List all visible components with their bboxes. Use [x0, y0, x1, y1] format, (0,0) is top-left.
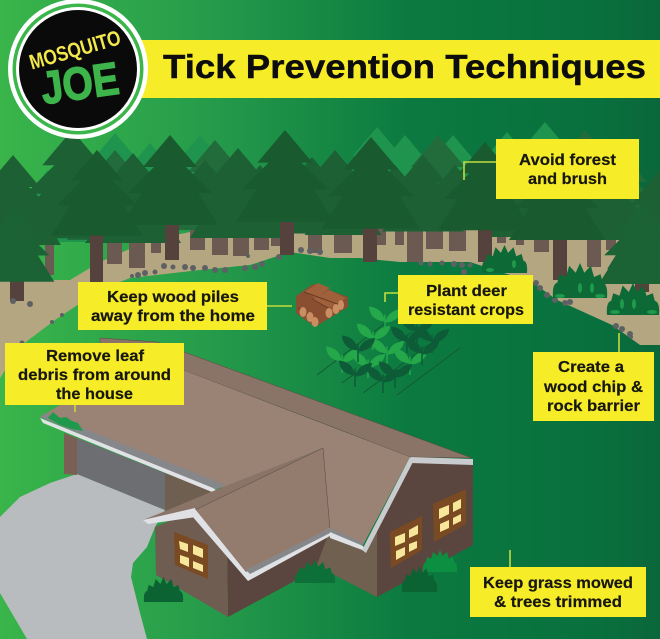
wood pile: [296, 283, 348, 327]
callout: deer resistant crops: resistant crops: [408, 302, 524, 319]
logo: [8, 0, 148, 139]
dirt path: [0, 222, 660, 378]
title bar: Tick Prevention Techniques: [163, 48, 646, 85]
callout: deer resistant crops: [385, 275, 533, 324]
crop rows: [317, 318, 460, 395]
logo: MOSQUITO: [27, 26, 123, 74]
callout: leaf debris: Remove leaf: [46, 348, 145, 365]
callout: avoid forest: [464, 139, 639, 199]
callout: barrier: Create a: [558, 359, 624, 376]
title bar: [140, 40, 660, 98]
bushes near the house: [144, 550, 457, 602]
bush leaf highlights: [486, 260, 657, 314]
side walls: [377, 460, 473, 597]
windows: [174, 489, 466, 579]
callout: avoid forest: and brush: [528, 171, 607, 188]
driveway: [0, 474, 165, 639]
house: [40, 338, 473, 617]
callout: grass mowed: Keep grass mowed: [483, 575, 633, 592]
stone border: [10, 247, 633, 346]
main roof: [100, 338, 472, 458]
logo: JOE: [37, 52, 122, 114]
callout: barrier: wood chip &: [543, 379, 643, 396]
callout: deer resistant crops: Plant deer: [426, 283, 507, 300]
callout: wood piles: [78, 282, 292, 330]
callout: wood piles: away from the home: [91, 308, 255, 325]
trim: [143, 508, 196, 524]
forest: [0, 122, 660, 301]
callout: barrier: rock barrier: [547, 398, 640, 415]
callout: grass mowed: [470, 550, 646, 617]
callout: leaf debris: [5, 343, 184, 412]
front gable roof: [143, 448, 323, 520]
gutter with leaves: [40, 413, 225, 491]
callout: avoid forest: Avoid forest: [519, 152, 616, 169]
window panes: [179, 499, 461, 572]
callout: leaf debris: the house: [56, 386, 133, 403]
callout: leaf debris: debris from around: [18, 367, 171, 384]
callout: grass mowed: & trees trimmed: [494, 594, 622, 611]
gutter leaves: [48, 412, 83, 431]
callout: barrier: [533, 333, 654, 421]
callout: wood piles: Keep wood piles: [107, 289, 239, 306]
bushes near the path: [482, 245, 659, 315]
garage wall: [64, 433, 77, 475]
crops: [326, 307, 449, 393]
